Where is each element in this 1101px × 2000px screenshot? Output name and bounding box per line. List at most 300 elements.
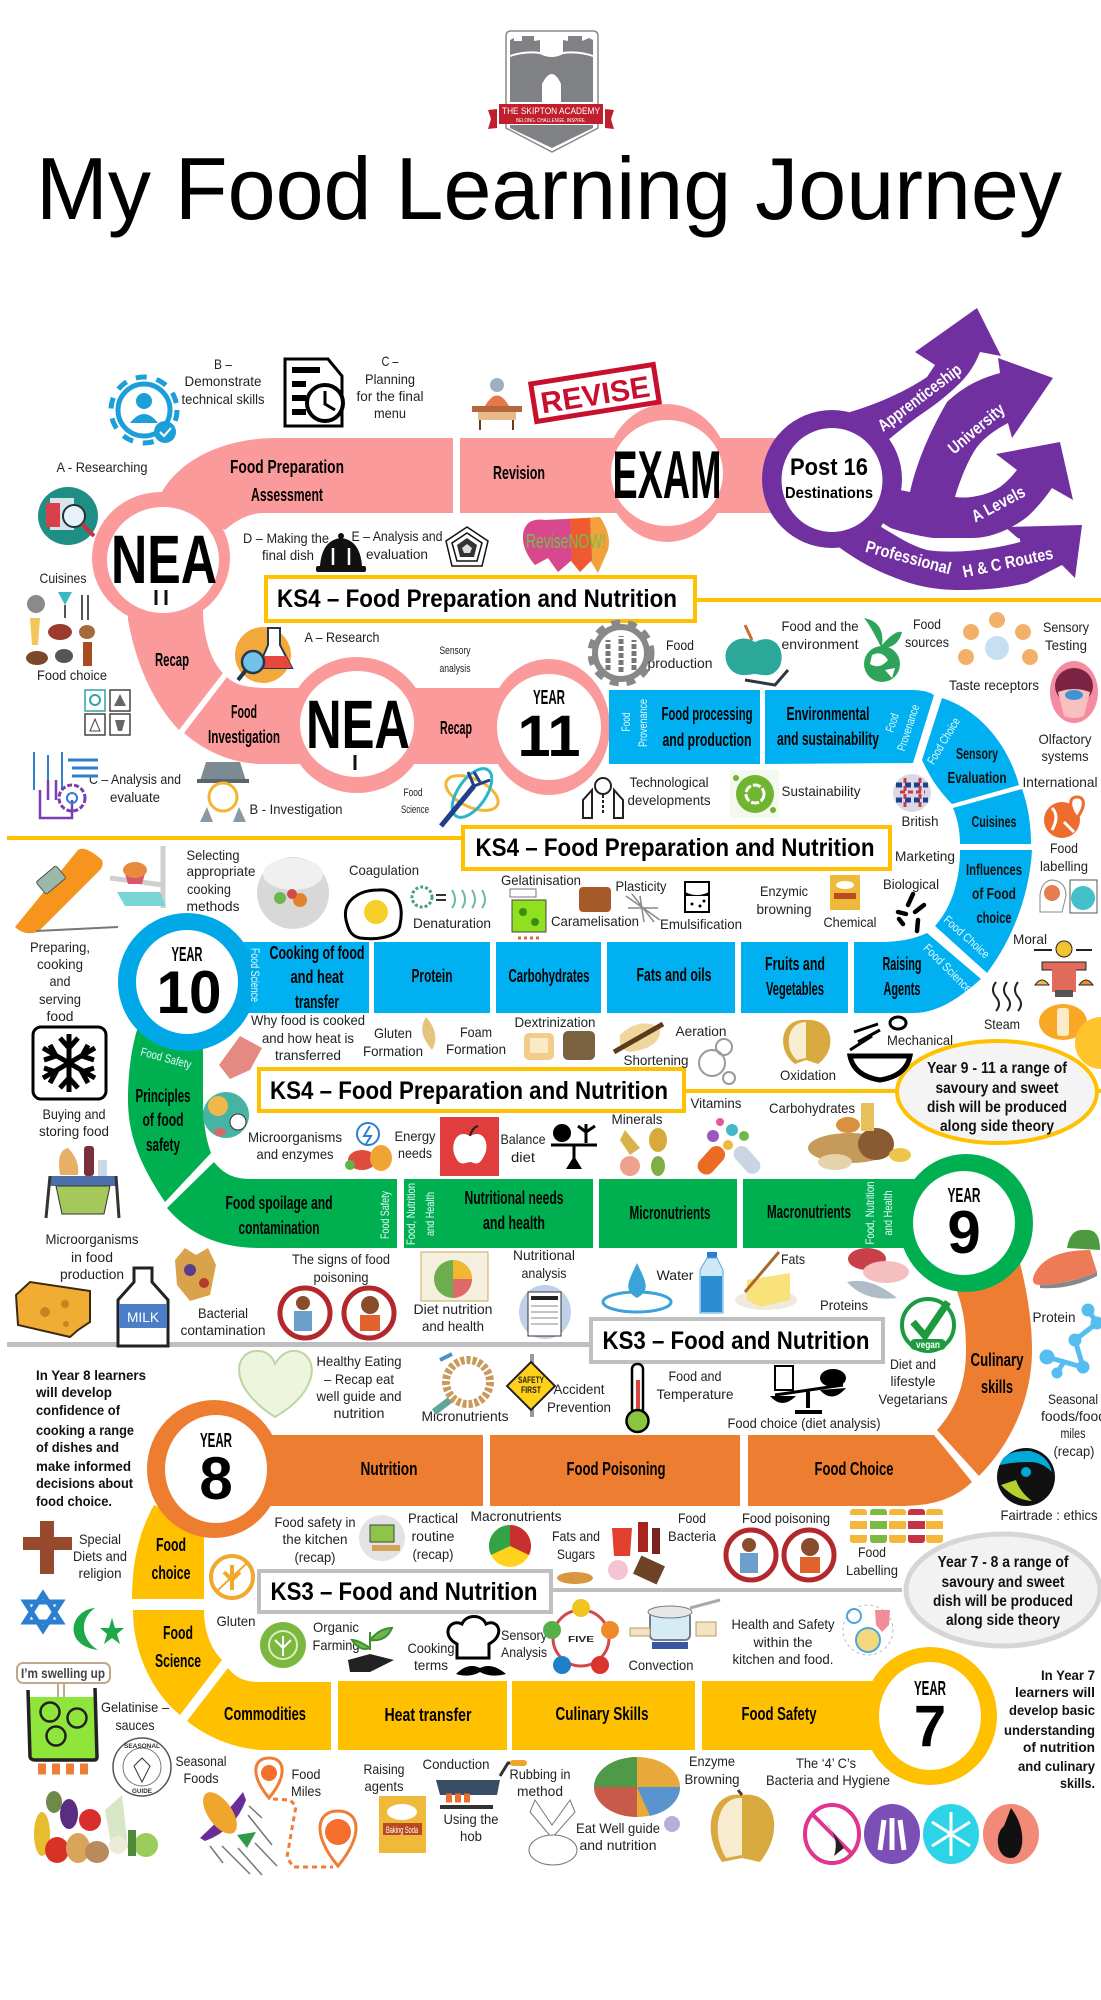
labels: Year 11 section topics: B - Investigation xyxy=(250,801,342,817)
band labels: blue section upper: of Food xyxy=(972,886,1016,903)
icon: food thermometer xyxy=(15,849,118,933)
icon: plant in hand xyxy=(348,1628,394,1672)
labels: Year 7 topics above band: Gluten xyxy=(216,1613,256,1629)
icon: gelatinise swelling beaker xyxy=(17,1663,110,1769)
icon: safety first sign xyxy=(507,1354,555,1417)
band labels: orange section xyxy=(360,1350,1024,1479)
labels: Year 8 topics above band xyxy=(316,1353,1101,1523)
labels: Year 8 topics below band: the kitchen xyxy=(282,1531,348,1547)
text block: In Year 7 learners: develop basic xyxy=(1009,1702,1095,1718)
labels: Year 9 topics below band xyxy=(46,1231,1076,1338)
icon: temperature thermometer xyxy=(626,1364,648,1432)
text block: In Year 8 learners: confidence of xyxy=(36,1402,120,1418)
labels: Year 9 topics below band: Water xyxy=(656,1267,694,1283)
labels: Year 7 topics above band: Analysis xyxy=(501,1644,547,1660)
icon: Star of David xyxy=(25,1594,61,1630)
band labels: orange section: Culinary xyxy=(970,1350,1024,1370)
band labels: blue section lower xyxy=(270,943,922,1012)
callout: Year 7 - 8 oval: savoury and sweet xyxy=(942,1574,1065,1591)
key stage box: KS4 lower: KS4 – Food Preparation and Nutrition xyxy=(270,1077,668,1105)
icon: health and safety plate xyxy=(843,1605,893,1655)
labels: Year 10 topics above band: appropriate xyxy=(186,863,256,879)
icon: whisk and bowl xyxy=(850,1017,910,1080)
labels: food provenance and choice topics: Sensory xyxy=(1043,619,1089,635)
icon: milk bottle: MILK xyxy=(127,1309,160,1325)
icon: student at desk xyxy=(472,378,522,430)
icon: gear with person xyxy=(111,377,177,443)
band labels: amber section xyxy=(152,1535,816,1725)
logo: The Skipton Academy shield: THE SKIPTON ACADEMY xyxy=(502,106,600,116)
icon: radar chart xyxy=(446,527,488,566)
band labels: Year 11 pink section: Recap xyxy=(440,718,472,738)
icon: detective xyxy=(197,762,249,822)
band labels: blue section lower: and heat xyxy=(290,967,344,987)
labels: Year 8 topics above band: Prevention xyxy=(547,1399,611,1415)
icon: water drop xyxy=(603,1263,671,1312)
labels: Year 8 topics below band: Macronutrients xyxy=(470,1508,562,1524)
labels: Year 10 topics below band: Buying and xyxy=(42,1106,106,1122)
band labels: blue section upper: and sustainability xyxy=(777,729,879,749)
labels: Year 7 topics below band: hob xyxy=(460,1828,482,1844)
icon: rubbing in hands and bowl xyxy=(529,1800,577,1865)
icon: emulsification beaker xyxy=(685,882,709,912)
labels: Year 7 topics below band: method xyxy=(517,1783,563,1799)
labels: food provenance and choice topics: sources xyxy=(905,634,949,650)
labels: Year 11 section topics: A - Researching xyxy=(56,459,148,475)
labels: Year 7 topics below band: Food xyxy=(292,1766,320,1782)
labels: Year 10 topics below band: Preparing, xyxy=(30,939,90,955)
labels: Year 9 topics above band xyxy=(248,1095,855,1165)
labels: Year 8 topics above band: Micronutrients xyxy=(422,1408,508,1424)
icon: weighing scales muffin xyxy=(110,846,166,908)
labels: Year 7 topics below band: Miles xyxy=(291,1783,321,1799)
NEA I label: NEA xyxy=(306,686,410,763)
side labels: green section xyxy=(139,1045,895,1245)
icon: moral scales xyxy=(1034,941,1093,997)
band labels: amber section: Heat transfer xyxy=(384,1705,472,1725)
labels: Year 7 topics above band: Health and Safety xyxy=(732,1616,834,1632)
labels: Year 8 topics below band xyxy=(73,1508,898,1581)
labels: Year 9 topics below band: Diet nutrition xyxy=(414,1301,492,1317)
icon: sustainability xyxy=(730,770,779,818)
icon: bubbles xyxy=(699,1039,735,1084)
arrow labels: post 16 routes xyxy=(863,360,1055,581)
labels: Year 7 topics below band: Eat Well guide xyxy=(576,1820,660,1836)
labels: Year 9 topics above band: Energy xyxy=(394,1128,436,1144)
band labels: Year 11 pink section: Recap xyxy=(155,650,189,670)
icon: pan on hob xyxy=(436,1760,527,1809)
labels: Year 7 topics below band: Browning xyxy=(684,1771,740,1787)
icon: organic farming badge xyxy=(260,1622,306,1668)
labels: food provenance and choice topics: Food xyxy=(913,616,941,632)
icon: bacteria on hand xyxy=(175,1248,216,1301)
icon: small app tiles xyxy=(85,690,130,735)
icon: Revise Now: ReviseNOW! xyxy=(526,531,606,553)
icon: British flags ball xyxy=(893,774,931,812)
icon: wheat gear xyxy=(590,622,652,684)
labels: Year 8 topics above band: Temperature xyxy=(656,1386,734,1402)
text block: In Year 7 learners: learners will xyxy=(1015,1684,1095,1700)
text block: In Year 8 learners: cooking a range xyxy=(36,1422,134,1438)
labels: Year 8 topics below band: Diets and xyxy=(73,1548,127,1564)
callout: Year 7 - 8 oval: Year 7 - 8 a range of xyxy=(938,1554,1069,1571)
side labels: blue section upper: Provenance xyxy=(636,699,650,747)
Year 9 label: 9 xyxy=(947,1199,981,1266)
band labels: amber section: Culinary Skills xyxy=(556,1704,648,1724)
band labels: Year 11 pink section: Food Preparation xyxy=(230,457,344,477)
labels: Year 11 section topics: C – Analysis and xyxy=(89,771,181,787)
icon: vegan badge: vegan xyxy=(916,1340,940,1351)
labels: Year 10 topics below band: transferred xyxy=(275,1047,341,1063)
icon: eatwell guide poster xyxy=(421,1252,488,1301)
labels: Year 8 topics below band: Food xyxy=(678,1510,706,1526)
labels: Year 10 topics below band: storing food xyxy=(39,1123,109,1139)
Post 16 label xyxy=(785,454,873,502)
year circles xyxy=(118,913,1033,1785)
labels: Year 8 topics below band: Sugars xyxy=(557,1546,595,1562)
text block: In Year 8 learners: will develop xyxy=(35,1384,112,1400)
icon: vegan badge xyxy=(902,1299,954,1351)
icon: fats and sugars xyxy=(557,1522,665,1585)
band labels: green section: Micronutrients xyxy=(630,1203,710,1223)
icon: steam xyxy=(993,982,1021,1011)
text block: In Year 7 learners xyxy=(1004,1667,1095,1791)
labels: Year 8 topics below band: Special xyxy=(79,1531,121,1547)
labels: Year 11 section topics: Sensory xyxy=(440,645,471,657)
icon: five senses ring: FIVE xyxy=(568,1635,595,1644)
labels: Year 8 topics below band: religion xyxy=(78,1565,122,1581)
callout: Year 9 - 11 oval: Year 9 - 11 a range of xyxy=(927,1060,1068,1077)
labels: Year 8 topics above band: miles xyxy=(1060,1425,1086,1441)
icon: wheat ear xyxy=(422,1017,435,1050)
labels: Year 11 section topics: Demonstrate xyxy=(184,373,262,389)
icon: minerals xyxy=(620,1128,667,1176)
logo: The Skipton Academy shield xyxy=(488,31,614,152)
band labels: green section: safety xyxy=(146,1135,180,1155)
band labels: blue section upper: Evaluation xyxy=(948,770,1006,787)
labels: food provenance and choice topics: International xyxy=(1022,774,1098,790)
band labels: green section: of food xyxy=(142,1110,184,1130)
icon: traffic light labels xyxy=(850,1509,943,1543)
band labels: blue section upper: Cuisines xyxy=(972,814,1017,831)
icon: balance apple and plant xyxy=(551,1124,597,1169)
labels: Year 11 section topics: Food xyxy=(404,787,422,799)
labels: Year 11 section topics: E – Analysis and xyxy=(352,528,442,544)
labels: food provenance and choice topics: production xyxy=(648,655,712,671)
icon: food poisoning signs xyxy=(280,1288,394,1338)
band labels: Year 11 pink section xyxy=(155,457,545,747)
labels: Year 11 section topics xyxy=(37,353,471,817)
labels: Year 7 topics below band: Seasonal xyxy=(176,1753,226,1769)
icon: gelatinise swelling beaker: I’m swelling up xyxy=(21,1665,105,1681)
key stage box: KS3 upper: KS3 – Food and Nutrition xyxy=(602,1327,870,1355)
labels: Year 7 topics below band: Rubbing in xyxy=(510,1766,570,1782)
icon: open mouth xyxy=(1050,661,1098,723)
side labels: green section: Food Safety xyxy=(139,1045,193,1072)
icon: proteins meat and fish xyxy=(847,1248,909,1299)
labels: Year 7 topics below band: The ‘4’ C’s xyxy=(796,1755,856,1771)
band labels: amber section: Food xyxy=(156,1535,186,1555)
side labels: blue section upper: Food xyxy=(619,712,633,732)
side labels: blue section upper: Food Choice xyxy=(924,715,963,767)
panel: orange Year 8 pathway xyxy=(260,1255,1032,1506)
callout: Year 9 - 11 oval xyxy=(897,1041,1097,1143)
text block: In Year 7 learners: and culinary xyxy=(1018,1758,1095,1774)
labels: Year 8 topics below band: (recap) xyxy=(412,1546,454,1562)
band labels: amber section: Science xyxy=(155,1651,201,1671)
icon: food badge edge xyxy=(1075,1017,1101,1069)
labels: Year 9 topics above band: Minerals xyxy=(612,1111,662,1127)
labels: Year 9 topics below band: and health xyxy=(422,1318,484,1334)
band labels: amber section: Commodities xyxy=(224,1704,306,1724)
icon: diet analysis scale xyxy=(770,1366,846,1412)
labels: Year 10 topics below band: Foam xyxy=(460,1024,492,1040)
labels: Year 10 topics below band: and how heat is xyxy=(262,1030,354,1046)
labels: Year 9 topics below band: Nutritional xyxy=(513,1247,575,1263)
band labels: Year 11 pink section: Revision xyxy=(493,463,545,483)
key stage box: KS3 upper xyxy=(591,1319,883,1362)
labels: Year 10 topics above band: Moral xyxy=(1013,931,1047,947)
text block: In Year 7 learners: of nutrition xyxy=(1023,1739,1095,1755)
icon: REVISE stamp: REVISE xyxy=(538,371,652,420)
labels: Year 9 topics below band: Fats xyxy=(781,1251,805,1267)
icon: cheese xyxy=(16,1282,90,1337)
labels: Year 8 topics below band: Food poisoning xyxy=(742,1510,830,1526)
icon: caramelised sugar xyxy=(579,887,611,912)
band labels: blue section lower: Agents xyxy=(884,979,920,999)
labels: Year 8 topics above band: – Recap eat xyxy=(324,1371,394,1387)
labels: Year 9 topics below band: Bacterial xyxy=(198,1305,248,1321)
icon: seasonal food guide badge xyxy=(113,1738,171,1796)
NEA I label xyxy=(306,686,410,770)
labels: Year 7 topics above band: Farming xyxy=(312,1637,360,1653)
icon: Revise Now xyxy=(523,517,609,573)
labels: Year 10 topics below band: Dextrinization xyxy=(514,1014,596,1030)
band labels: orange section: skills xyxy=(981,1377,1013,1397)
icon: eatwell plate xyxy=(594,1757,680,1832)
text block: In Year 8 learners: decisions about xyxy=(36,1475,133,1491)
callout: Year 7 - 8 oval: dish will be produced xyxy=(933,1593,1073,1610)
text block: In Year 8 learners: In Year 8 learners xyxy=(36,1367,146,1383)
labels: Year 10 topics above band xyxy=(186,847,1047,1032)
labels: Year 10 topics below band: food xyxy=(46,1008,74,1024)
labels: Year 8 topics below band: Practical xyxy=(408,1510,458,1526)
icon: researching magnifier xyxy=(38,487,98,545)
labels: Year 8 topics below band: Food xyxy=(858,1544,886,1560)
band labels: Year 11 pink section: Investigation xyxy=(208,727,280,747)
band labels: amber section: Food Safety xyxy=(742,1704,816,1724)
labels: Year 11 section topics: A – Research xyxy=(304,629,380,645)
icon: vegetable characters xyxy=(34,1791,158,1863)
labels: Year 10 topics above band: Gelatinisation xyxy=(501,872,581,888)
Year 9 label: YEAR xyxy=(948,1185,981,1207)
labels: Year 11 section topics: C – xyxy=(382,353,399,369)
labels: Year 7 topics below band xyxy=(176,1753,890,1853)
band labels: green section: contamination xyxy=(238,1218,320,1238)
labels: Year 7 topics below band: agents xyxy=(364,1778,404,1794)
labels: Year 9 topics below band: poisoning xyxy=(314,1269,368,1285)
band labels: amber section: choice xyxy=(152,1563,190,1583)
icon: oxidised apple half xyxy=(783,1020,830,1064)
band labels: green section: Nutritional needs xyxy=(464,1188,564,1208)
labels: Year 8 topics above band: Diet and xyxy=(890,1356,936,1372)
labels: Year 9 topics above band: Carbohydrates xyxy=(769,1100,855,1116)
icon: bacteria cluster xyxy=(219,1036,262,1079)
labels: food provenance and choice topics: Marketing xyxy=(895,848,955,864)
icon: bread and grains xyxy=(808,1103,911,1170)
icon: five senses ring xyxy=(543,1599,619,1674)
icon: gelatinisation beaker xyxy=(510,889,546,938)
labels: Year 7 topics below band: and nutrition xyxy=(580,1837,656,1853)
text block: In Year 7 learners: skills. xyxy=(1060,1775,1095,1791)
Post 16 label: Post 16 xyxy=(790,454,868,481)
band labels: blue section upper: and production xyxy=(662,730,752,750)
callout: Year 7 - 8 oval xyxy=(906,1534,1100,1646)
labels: food provenance and choice topics: Testing xyxy=(1045,637,1087,653)
labels: food provenance and choice topics: Food and the xyxy=(782,618,859,634)
labels: Year 7 topics above band: Organic xyxy=(313,1619,359,1635)
side labels: green section: Food, Nutrition xyxy=(404,1183,418,1245)
labels: Year 11 section topics: Planning xyxy=(365,371,415,387)
labels: Year 7 topics above band: within the xyxy=(753,1634,813,1650)
Year 7 label: 7 xyxy=(914,1694,946,1759)
key stage box: KS4 middle xyxy=(463,827,890,869)
labels: Year 7 topics above band xyxy=(101,1613,834,1733)
labels: food provenance and choice topics: Olfactory xyxy=(1038,731,1092,747)
band labels: green section: Food spoilage and xyxy=(226,1193,332,1213)
labels: Year 8 topics below band: Bacteria xyxy=(668,1528,716,1544)
NEA II label xyxy=(111,521,217,605)
labels: Year 10 topics below band: Formation xyxy=(363,1043,423,1059)
labels: Year 9 topics below band: Microorganisms xyxy=(46,1231,138,1247)
labels: Year 11 section topics: Science xyxy=(401,804,429,816)
labels: Year 11 section topics: technical skills xyxy=(182,391,264,407)
labels: Year 9 topics below band: production xyxy=(60,1266,124,1282)
icon: salmon xyxy=(1033,1230,1100,1288)
key stage box: KS3 lower: KS3 – Food and Nutrition xyxy=(270,1578,538,1606)
text block: In Year 8 learners: of dishes and xyxy=(36,1439,119,1455)
labels: Year 10 topics above band: browning xyxy=(756,901,812,917)
labels: Year 11 section topics: analysis xyxy=(440,663,471,675)
arrow labels: post 16 routes: H & C Routes xyxy=(961,544,1055,581)
band labels: Year 11 pink section: Food xyxy=(231,702,257,722)
band labels: blue section lower: Vegetables xyxy=(766,979,824,999)
labels: Year 8 topics above band: lifestyle xyxy=(890,1373,936,1389)
icon: microbes circle xyxy=(203,1092,249,1138)
labels: Year 10 topics below band: serving xyxy=(39,991,81,1007)
Year 7 label: YEAR xyxy=(914,1678,946,1700)
side labels: blue section upper: Food Science xyxy=(248,948,262,1002)
icon: gluten free xyxy=(211,1556,253,1598)
icon: Christian cross xyxy=(23,1521,72,1574)
icon: oil bottle badge xyxy=(1039,1004,1087,1040)
panel: Year 11 pink pathway xyxy=(92,404,780,795)
labels: Year 7 topics below band: Using the xyxy=(444,1811,499,1827)
band labels: green section xyxy=(136,1086,851,1238)
labels: Year 9 topics below band: in food xyxy=(71,1249,113,1265)
icon: convection pot xyxy=(630,1600,720,1649)
key stage box: KS4 lower xyxy=(259,1069,684,1111)
icon: baking soda box: Baking Soda xyxy=(386,1825,418,1835)
labels: Year 7 topics below band: Enzyme xyxy=(689,1753,735,1769)
labels: Year 8 topics below band: Fats and xyxy=(552,1528,600,1544)
labels: Year 7 topics above band: kitchen and food. xyxy=(732,1651,834,1667)
band labels: green section: Principles xyxy=(136,1086,190,1106)
labels: Year 8 topics above band: Food choice (diet analysis) xyxy=(728,1415,880,1431)
labels: food provenance and choice topics: Sustainability xyxy=(782,783,860,799)
band labels: blue section lower: transfer xyxy=(295,992,339,1012)
key stage box: KS3 lower xyxy=(259,1571,551,1612)
band labels: amber section: Food xyxy=(163,1623,193,1643)
labels: Year 10 topics above band: methods xyxy=(186,898,240,914)
labels: Year 8 topics above band: well guide and xyxy=(316,1388,402,1404)
panel: green Year 9 pathway xyxy=(128,1030,933,1248)
icon: red apple tile xyxy=(440,1117,499,1176)
labels: Year 9 topics below band: contamination xyxy=(180,1322,266,1338)
labels: Year 11 section topics: Cuisines xyxy=(40,570,86,586)
labels: Year 7 topics above band: Cooking xyxy=(408,1640,454,1656)
icon: flask and magnifier xyxy=(235,627,292,683)
text block: In Year 8 learners: food choice. xyxy=(36,1493,112,1509)
band labels: blue section upper: Food processing xyxy=(662,704,752,724)
icon: safety first sign: FIRST xyxy=(521,1385,541,1395)
key stage box: KS4 top xyxy=(266,577,695,621)
labels: Year 8 topics above band: (recap) xyxy=(1054,1443,1094,1459)
labels: Year 10 topics above band: Plasticity xyxy=(616,878,666,894)
icon: apple recycle xyxy=(726,625,788,685)
key stage box: KS4 top: KS4 – Food Preparation and Nutrition xyxy=(277,585,677,613)
labels: Year 10 topics below band: Mechanical xyxy=(887,1032,953,1048)
labels: Year 7 topics above band: sauces xyxy=(116,1717,154,1733)
icon: seasonal food guide badge: SEASONAL xyxy=(124,1744,160,1750)
panel: amber Year 7 pathway xyxy=(132,1505,932,1750)
labels: Year 8 topics above band: Vegetarians xyxy=(878,1391,948,1407)
icon: fried egg xyxy=(345,890,401,939)
icon: serving cloche xyxy=(316,533,366,572)
arrow labels: post 16 routes: A Levels xyxy=(968,482,1028,526)
labels: food provenance and choice topics: developments xyxy=(628,792,710,808)
Year 8 label: YEAR xyxy=(200,1430,232,1452)
icon: healthy eating heart xyxy=(239,1351,312,1417)
labels: Year 10 topics above band: cooking xyxy=(187,881,231,897)
labels: Year 7 topics above band: Convection xyxy=(628,1657,694,1673)
icon: safety first sign: SAFETY xyxy=(518,1375,544,1385)
labels: Year 8 topics above band: nutrition xyxy=(334,1405,384,1421)
icon: toast slices xyxy=(524,1031,595,1060)
labels: Year 10 topics above band: Coagulation xyxy=(349,862,419,878)
Year 8 label: 8 xyxy=(199,1445,233,1512)
icon: pot on board xyxy=(359,1515,405,1561)
icon: protein molecule xyxy=(1040,1304,1101,1378)
labels: Year 7 topics below band: Raising xyxy=(364,1761,404,1777)
Year 11 label: YEAR xyxy=(533,687,565,709)
labels: Year 10 topics below band: Formation xyxy=(446,1041,506,1057)
icon: analysis hand and gears xyxy=(34,752,98,818)
labels: Year 9 topics above band: and enzymes xyxy=(256,1146,334,1162)
icon: oxidised apple xyxy=(711,1790,774,1862)
icon: freezer snowflake xyxy=(33,1027,106,1099)
icon: water bottle xyxy=(700,1252,723,1313)
band labels: blue section lower: Fats and oils xyxy=(636,965,712,985)
band labels: blue section lower: Protein xyxy=(412,966,452,986)
icon: butter xyxy=(735,1252,797,1310)
labels: Year 10 topics below band: and xyxy=(50,973,70,989)
labels: Year 9 topics below band: analysis xyxy=(522,1265,566,1281)
labels: food provenance and choice topics: British xyxy=(902,813,938,829)
arrow labels: post 16 routes: Apprenticeship xyxy=(874,360,965,435)
icon: aubergine with travel lines xyxy=(196,1786,277,1875)
labels: Year 8 topics below band: Labelling xyxy=(846,1562,898,1578)
